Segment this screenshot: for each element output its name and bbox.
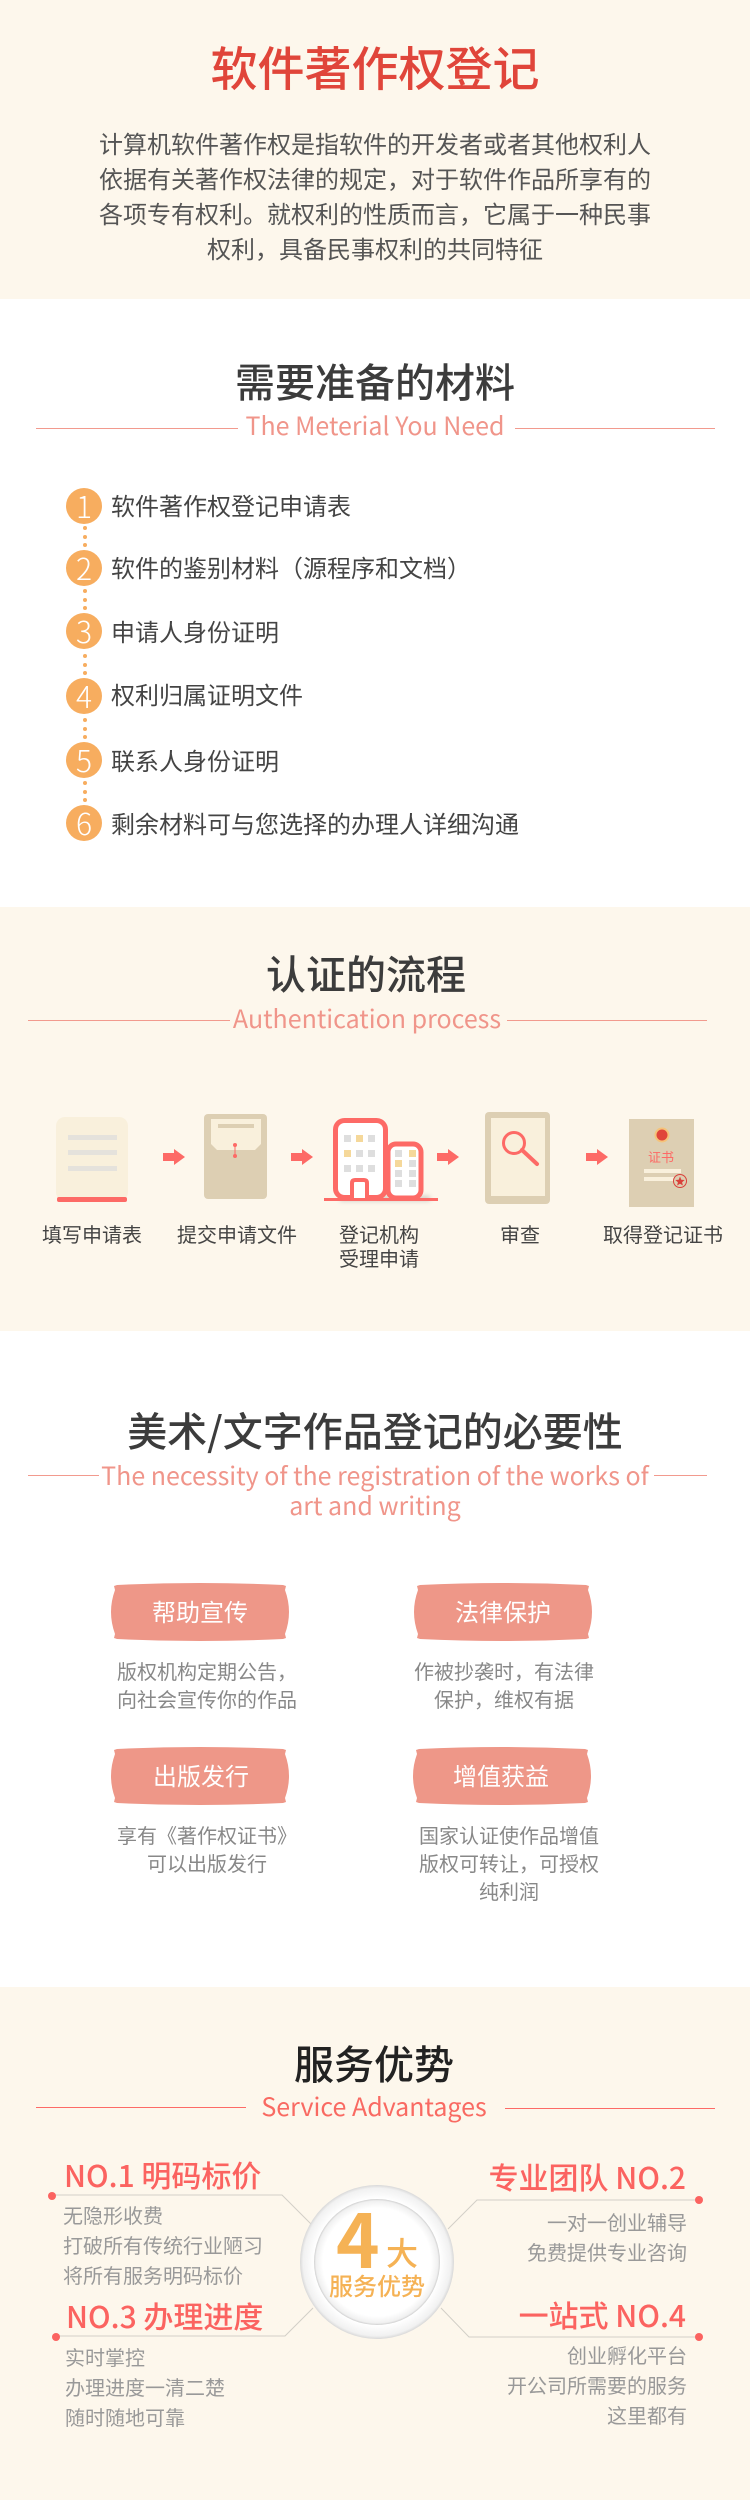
advantage text 4: [507, 2340, 687, 2429]
description: value gain: 纯利润: [479, 1876, 539, 1905]
advantage title 1: NO.1 明码标价: [64, 2152, 261, 2196]
badge shape 4: [413, 1747, 591, 1805]
badge shape 3: [111, 1747, 289, 1805]
description: publishing: 可以出版发行: [147, 1848, 267, 1877]
label: fill form: 填写申请表: [42, 1219, 142, 1248]
step 6 number: [66, 805, 102, 841]
step 1 number: [66, 488, 102, 524]
label: submit files: 提交申请文件: [177, 1219, 297, 1248]
label: registration office: [339, 1219, 419, 1272]
step 4 number: 4: [76, 673, 92, 717]
advantage text 1: 将所有服务明码标价: [63, 2260, 243, 2289]
subtitle: advantages: Service Advantages: [261, 2088, 487, 2124]
intro paragraph: 各项专有权利。就权利的性质而言，它属于一种民事: [99, 195, 651, 230]
panel: advantages: [0, 1987, 750, 2500]
advantage text 4: 这里都有: [607, 2400, 687, 2429]
step 3 number: 3: [76, 608, 92, 652]
step 1 text: 软件著作权登记申请表: [111, 487, 351, 522]
connector NO.3: [52, 2308, 313, 2341]
advantage text 4: 创业孵化平台: [567, 2340, 687, 2369]
step 5 number: [66, 742, 102, 778]
step 4 number: [66, 678, 102, 714]
intro paragraph: 权利，具备民事权利的共同特征: [207, 230, 543, 265]
panel: process: [0, 907, 750, 1331]
flow icons: [56, 1112, 694, 1207]
badges: [111, 1583, 592, 1805]
panel: necessity: [0, 1331, 750, 1987]
step 6 number: 6: [76, 800, 92, 844]
advantage text 3: 实时掌控: [65, 2342, 145, 2371]
description: value gain: 版权可转让，可授权: [419, 1848, 599, 1877]
intro paragraph: 计算机软件著作权是指软件的开发者或者其他权利人: [99, 125, 651, 160]
advantage title 2: 专业团队 NO.2: [489, 2154, 686, 2198]
advantage title 4: 一站式 NO.4: [519, 2292, 686, 2336]
icon: buildings: [324, 1120, 438, 1201]
label: registration office: 受理申请: [339, 1243, 419, 1272]
list: required materials: [66, 483, 519, 844]
title: 软件著作权登记: [210, 31, 540, 100]
connector NO.1: [48, 2192, 311, 2224]
advantage text 2: [527, 2207, 687, 2266]
description: publishing: [117, 1820, 297, 1877]
badge shape 2: [414, 1583, 592, 1641]
advantage text 1: [63, 2200, 263, 2289]
badge text: publicity: 帮助宣传: [152, 1593, 248, 1628]
subtitle: necessity: The necessity of the registration of the works of: [101, 1457, 649, 1493]
icon: certificate: [629, 1119, 694, 1207]
label: review: 审查: [500, 1219, 540, 1248]
badge text: value gain: 增值获益: [453, 1757, 549, 1792]
advantage text 1: 打破所有传统行业陋习: [63, 2230, 263, 2259]
description: legal protection: [414, 1656, 594, 1713]
label: registration office: 登记机构: [339, 1219, 419, 1248]
heading: process: 认证的流程: [266, 943, 466, 1001]
description: legal protection: 保护，维权有据: [434, 1684, 574, 1713]
badge text: publishing: 出版发行: [153, 1757, 249, 1792]
description: value gain: 国家认证使作品增值: [419, 1820, 599, 1849]
arrow 3: [437, 1149, 459, 1165]
badge text: legal protection: 法律保护: [455, 1593, 551, 1628]
step 5 number: 5: [76, 737, 92, 781]
description: legal protection: 作被抄袭时，有法律: [414, 1656, 594, 1685]
heading: materials: 需要准备的材料: [235, 351, 515, 409]
arrow 4: [586, 1149, 608, 1165]
step 3 number: [66, 613, 102, 649]
heading: necessity: 美术/文字作品登记的必要性: [127, 1400, 623, 1458]
connector NO.4: [441, 2308, 703, 2341]
description: publicity: 向社会宣传你的作品: [117, 1684, 297, 1713]
description: publishing: 享有《著作权证书》: [117, 1820, 297, 1849]
subtitle: necessity: [28, 1457, 707, 1523]
step 3 text: 申请人身份证明: [111, 613, 279, 648]
panel: intro: [0, 0, 750, 299]
description: publicity: 版权机构定期公告，: [117, 1656, 297, 1685]
subtitle: materials: The Meterial You Need: [245, 407, 505, 443]
step 5 text: 联系人身份证明: [111, 742, 279, 777]
description: publicity: [117, 1656, 297, 1713]
panel: materials: [0, 299, 750, 907]
centre ring: [300, 2185, 454, 2339]
advantage text 3: [65, 2342, 225, 2431]
step 6 text: 剩余材料可与您选择的办理人详细沟通: [111, 805, 519, 840]
heading: advantages: 服务优势: [294, 2033, 454, 2091]
icon: certificate: 证书: [648, 1147, 674, 1166]
advantage text 2: 免费提供专业咨询: [527, 2237, 687, 2266]
step 2 number: 2: [76, 545, 92, 589]
connectors and centre badge: [48, 2185, 703, 2341]
centre label: 服务优势: [329, 2267, 425, 2302]
step 4 text: 权利归属证明文件: [111, 676, 303, 711]
advantage text 3: 办理进度一清二楚: [65, 2372, 225, 2401]
description: value gain: [419, 1820, 599, 1905]
step 1 number: 1: [76, 483, 92, 527]
subtitle: process: Authentication process: [233, 1000, 501, 1036]
subtitle: necessity: art and writing: [289, 1487, 461, 1523]
connector NO.2: [448, 2196, 703, 2229]
arrow 1: [163, 1149, 185, 1165]
icon: form: [56, 1117, 128, 1202]
advantage text 3: 随时随地可靠: [65, 2402, 185, 2431]
icon: tablet with magnifier: [485, 1112, 550, 1204]
icon: envelope: [204, 1114, 267, 1199]
intro paragraph: 依据有关著作权法律的规定，对于软件作品所享有的: [99, 160, 651, 195]
advantage text 4: 开公司所需要的服务: [507, 2370, 687, 2399]
advantage text 2: 一对一创业辅导: [547, 2207, 687, 2236]
advantage title 3: NO.3 办理进度: [66, 2293, 263, 2337]
step 2 text: 软件的鉴别材料（源程序和文档）: [111, 549, 471, 584]
advantage text 1: 无隐形收费: [63, 2200, 163, 2229]
label: get certificate: 取得登记证书: [603, 1219, 723, 1248]
intro paragraph: [99, 125, 651, 265]
badge shape 1: [111, 1583, 289, 1641]
character 大: 大: [386, 2229, 418, 2275]
big number 4: 4: [336, 2183, 380, 2290]
arrow 2: [291, 1149, 313, 1165]
step 2 number: [66, 550, 102, 586]
